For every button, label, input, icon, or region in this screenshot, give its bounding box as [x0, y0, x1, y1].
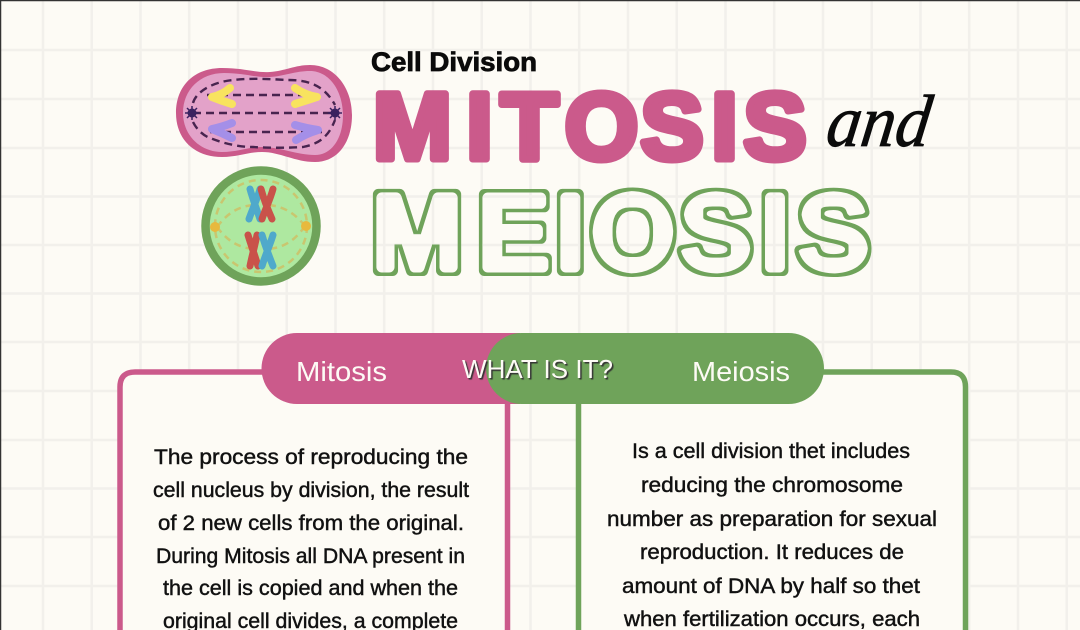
text block: meiosis definition: reducing the chromosome	[641, 474, 903, 497]
header pill	[261, 333, 824, 404]
subtitle: Cell Division: Cell Division	[371, 47, 537, 77]
icon: mitosis cell	[176, 65, 352, 162]
text block: mitosis definition: During Mitosis all DNA present in	[156, 545, 465, 568]
text block: meiosis definition: reproduction. It reduces de	[640, 541, 904, 564]
text block: mitosis definition: of 2 new cells from the original.	[158, 512, 464, 535]
text block: mitosis definition	[153, 446, 469, 630]
panel: meiosis	[578, 372, 966, 630]
title: and: and	[822, 81, 937, 163]
text block: mitosis definition: cell nucleus by division, the result	[153, 479, 469, 502]
icon: meiosis cell	[206, 170, 316, 282]
text block: meiosis definition	[607, 440, 937, 630]
label: Meiosis: Meiosis	[692, 356, 790, 387]
title: MITOSIS: MITOSIS	[373, 74, 807, 180]
text block: meiosis definition: amount of DNA by half so thet	[622, 575, 920, 598]
panel: mitosis	[120, 372, 508, 630]
label: WHAT IS IT?: WHAT IS IT?	[462, 354, 613, 384]
text block: mitosis definition: the cell is copied and when the	[163, 577, 458, 600]
title: MEIOSIS outline: MEIOSIS	[371, 172, 870, 294]
text block: meiosis definition: number as preparation for sexual	[607, 508, 937, 531]
label: Mitosis: Mitosis	[296, 356, 387, 387]
text block: mitosis definition: The process of reproducing the	[154, 446, 468, 469]
text block: meiosis definition: Is a cell division thet includes	[632, 440, 910, 463]
